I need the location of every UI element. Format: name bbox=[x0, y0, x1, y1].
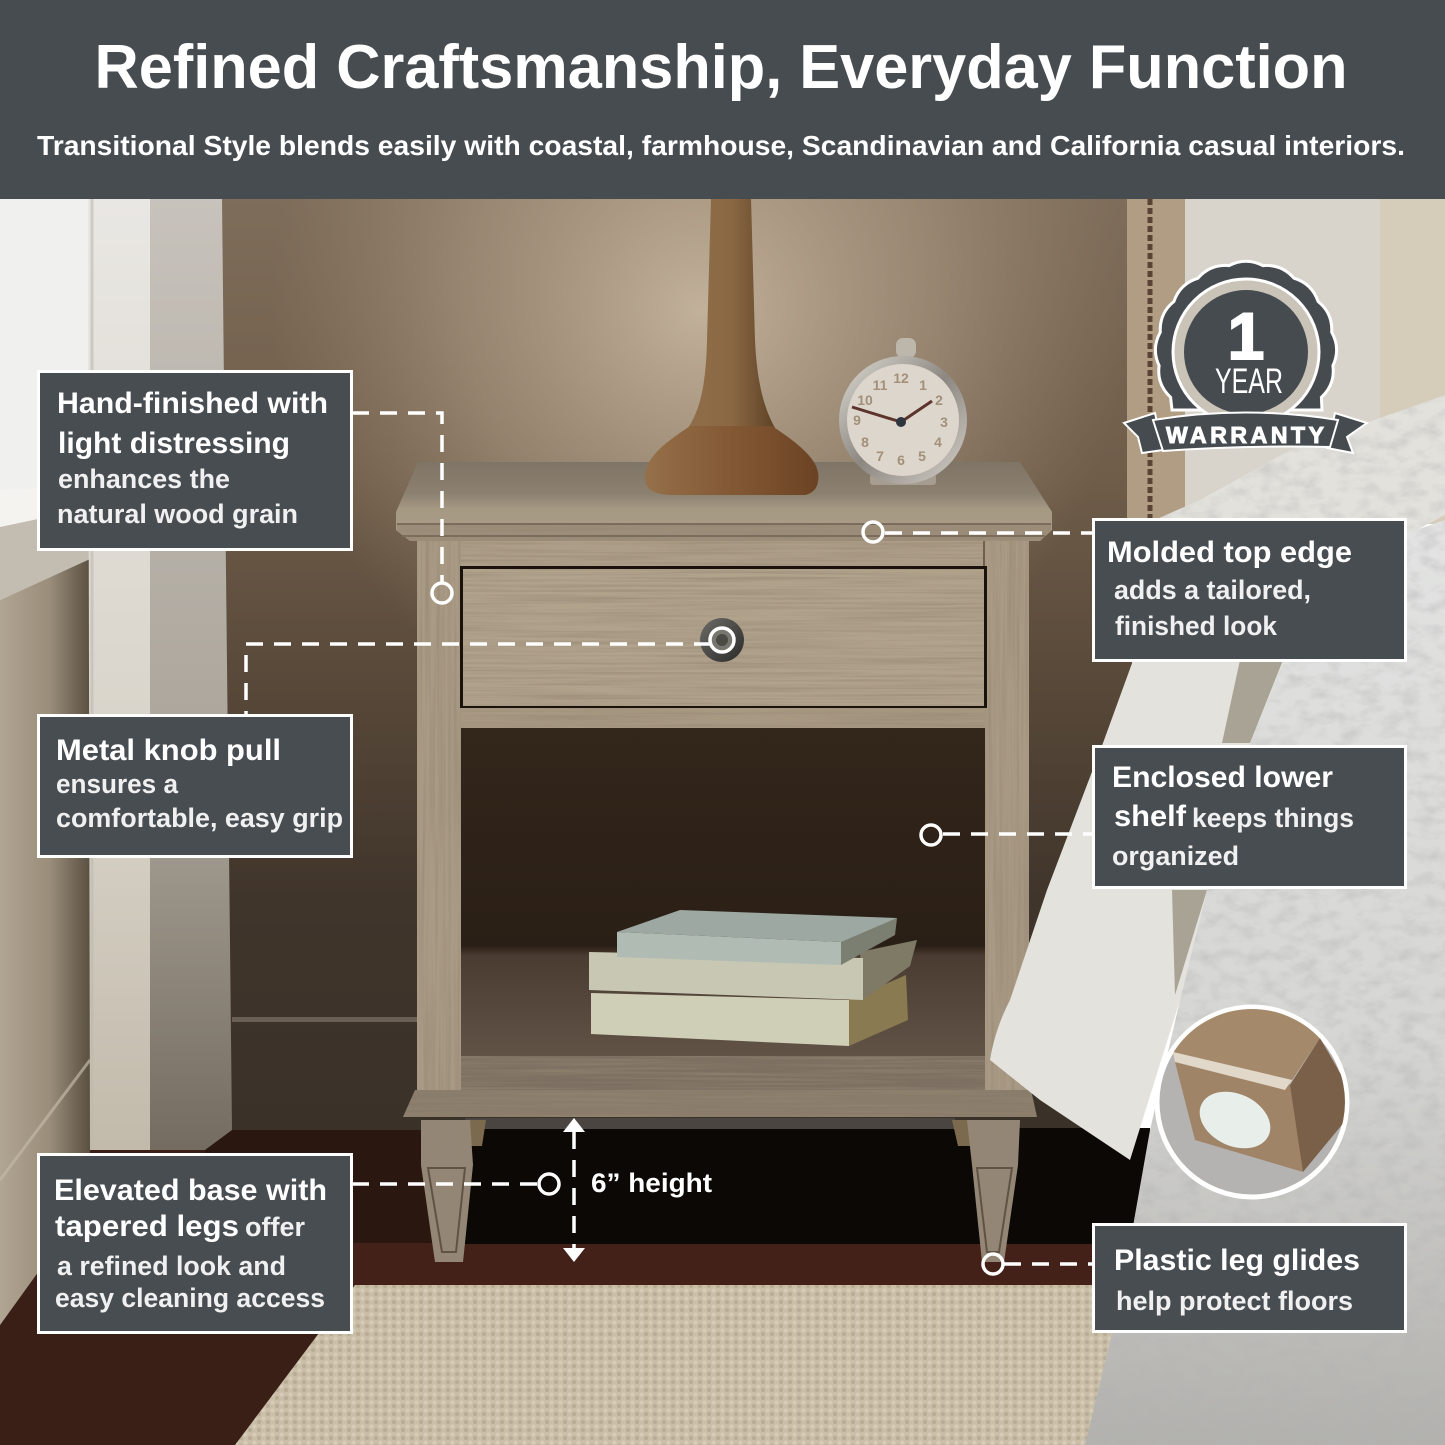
callout: elevated base: a refined look and bbox=[57, 1251, 286, 1281]
leg glide inset bbox=[1157, 1000, 1350, 1197]
callout: hand-finished bbox=[38, 372, 352, 550]
drawer bbox=[460, 566, 987, 708]
seal disc bbox=[1184, 290, 1308, 414]
callout: molded top edge: finished look bbox=[1115, 611, 1278, 641]
callout: metal knob: ensures a bbox=[56, 769, 179, 799]
clock: 6 bbox=[897, 452, 905, 468]
knob bbox=[700, 618, 744, 662]
clock: 1 bbox=[919, 377, 927, 393]
callout: enclosed lower shelf bbox=[1094, 746, 1406, 888]
callout: plastic leg glides bbox=[1094, 1224, 1406, 1332]
callout: enclosed lower shelf: organized bbox=[1112, 841, 1239, 871]
subtitle: Transitional Style blends easily with coastal, farmhouse, Scandinavian and California casual interiors. bbox=[37, 130, 1405, 161]
clock: 8 bbox=[861, 434, 869, 450]
callout: elevated base: tapered legs bbox=[55, 1210, 239, 1243]
left post bbox=[417, 541, 461, 1091]
shelf front bbox=[461, 1056, 985, 1092]
callout: hand-finished: natural wood grain bbox=[57, 499, 298, 529]
right post bbox=[985, 541, 1029, 1091]
callout: molded top edge: adds a tailored, bbox=[1114, 575, 1311, 605]
bedding bbox=[990, 395, 1445, 1445]
callout: plastic leg glides: Plastic leg glides bbox=[1114, 1244, 1360, 1277]
ribbon bbox=[1124, 412, 1367, 453]
clock: 12 bbox=[893, 370, 909, 386]
upper rail bbox=[461, 541, 983, 569]
height label: 6” height bbox=[591, 1168, 712, 1198]
callout: elevated base: Elevated base with bbox=[54, 1174, 327, 1207]
clock: 2 bbox=[935, 392, 943, 408]
header band bbox=[0, 0, 1445, 199]
middle book bbox=[860, 940, 917, 1000]
height arrow heads bbox=[563, 1118, 585, 1262]
warranty badge bbox=[1124, 261, 1367, 453]
callout: metal knob bbox=[38, 716, 352, 856]
rail bbox=[461, 708, 985, 728]
callout: plastic leg glides: help protect floors bbox=[1116, 1286, 1353, 1316]
clock: 9 bbox=[853, 412, 861, 428]
callout: elevated base: offer bbox=[245, 1212, 305, 1242]
seal bbox=[1155, 261, 1337, 410]
quilted coverlet bbox=[1085, 520, 1445, 1445]
leader end markers bbox=[432, 522, 1003, 1274]
year: YEAR bbox=[1215, 362, 1283, 401]
clock: 5 bbox=[918, 448, 926, 464]
callout: molded top edge: Molded top edge bbox=[1107, 536, 1352, 569]
room background bbox=[0, 199, 1150, 1445]
rug bbox=[235, 1285, 1125, 1445]
nightstand bbox=[396, 462, 1052, 1262]
callout: hand-finished: Hand-finished with bbox=[57, 387, 328, 420]
clock: 7 bbox=[876, 448, 884, 464]
callout: elevated base: easy cleaning access bbox=[55, 1283, 325, 1313]
callout: enclosed lower shelf: keeps things bbox=[1192, 803, 1354, 833]
top bbox=[396, 462, 1052, 541]
leader lines bbox=[246, 413, 1092, 1264]
clock: 3 bbox=[940, 414, 948, 430]
title: Refined Craftsmanship, Everyday Function bbox=[94, 33, 1348, 102]
callout: hand-finished: light distressing bbox=[58, 427, 290, 460]
callout: elevated base bbox=[38, 1154, 352, 1332]
headboard and pillow bbox=[1127, 199, 1445, 524]
ribbon label: WARRANTY bbox=[1166, 422, 1324, 448]
throw blanket bbox=[990, 640, 1300, 1160]
callout: metal knob: Metal knob pull bbox=[56, 734, 281, 767]
open shelf bbox=[461, 728, 985, 1058]
callout: metal knob: comfortable, easy grip bbox=[56, 803, 343, 833]
upper bedding bbox=[1150, 395, 1445, 600]
base molding bbox=[403, 1090, 1037, 1117]
callout: hand-finished: enhances the bbox=[58, 464, 230, 494]
number: 1 bbox=[1228, 299, 1264, 373]
curtain bbox=[88, 199, 232, 1150]
clock bbox=[839, 338, 967, 485]
clock: 4 bbox=[934, 434, 942, 450]
top book bbox=[840, 918, 897, 965]
seal ring bbox=[1173, 279, 1319, 425]
blanket folds bbox=[1172, 660, 1283, 995]
callout: enclosed lower shelf: Enclosed lower bbox=[1112, 761, 1333, 794]
callout: molded top edge bbox=[1094, 520, 1406, 660]
clock: 11 bbox=[873, 377, 888, 393]
books bbox=[589, 910, 917, 1046]
callout: enclosed lower shelf: shelf bbox=[1114, 800, 1187, 833]
lamp bbox=[645, 199, 818, 495]
legs bbox=[421, 1120, 1020, 1262]
clock: 10 bbox=[857, 392, 873, 408]
bottom book bbox=[849, 975, 908, 1046]
